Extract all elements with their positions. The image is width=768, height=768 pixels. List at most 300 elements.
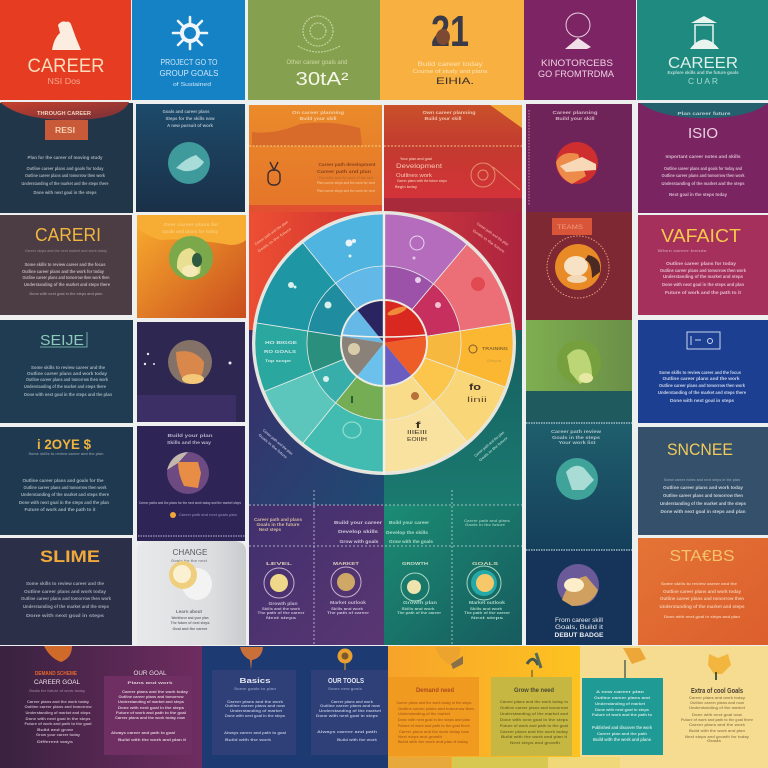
card text block: Always career and path to goal (111, 731, 175, 735)
wheel text: left segment: Top scope (265, 359, 291, 363)
card (104, 676, 192, 755)
text block (19, 452, 110, 512)
panel: purple card with teal cap (638, 103, 768, 213)
text block: lower right: Skills and work (331, 607, 364, 611)
left text block: Future of work and path to the goal (24, 722, 92, 726)
cream text block: Build with the work and plan (689, 729, 746, 733)
cream text block (681, 688, 753, 743)
text block: Goals and plans for today (162, 229, 219, 234)
wheel text: left segment: RO GOALS (264, 349, 296, 354)
bottom band (249, 205, 382, 212)
panel: bottom cream section (580, 646, 768, 768)
icon: white hat (52, 21, 81, 50)
text block (658, 249, 746, 295)
heading text (422, 110, 476, 121)
heading text: On career planning (292, 110, 344, 115)
olive card text: Career plans and the work today (500, 730, 569, 734)
subheading: C U A R (688, 77, 718, 86)
icon: circle on hat (565, 13, 591, 49)
left text block (24, 671, 92, 744)
center horizontal divider (342, 335, 426, 337)
text block: upper left: Grow with the goals (389, 539, 434, 544)
text block: Begin today (395, 185, 418, 189)
text block: Understanding of the market and steps there (24, 384, 106, 389)
text block: Plan for the career of moving study (28, 155, 103, 160)
panel: indigo card with fist circle (137, 426, 245, 541)
text block: Outline career plans and work today (663, 589, 742, 594)
olive card text: Future of work and path to the goal (500, 724, 568, 728)
subheading: NSI Dos (48, 77, 80, 86)
left text block: Goals for future of work today (29, 689, 86, 693)
text block: Understanding of the market and steps (663, 274, 744, 279)
panel: light gray card (137, 541, 246, 645)
icon: portrait circle (168, 340, 212, 384)
teal card text: Career plan and the path (597, 732, 648, 736)
text block: upper left: Build your career (389, 520, 429, 525)
circle item 3: GROWTH (402, 561, 428, 566)
left text block: Build and grow (37, 728, 73, 732)
text block: Future of work and the path to it (665, 290, 742, 295)
text block: Build your plan (168, 433, 213, 438)
text block: DEBUT BADGE (554, 632, 604, 639)
text block: Understanding of the market and the steps (660, 501, 747, 506)
tag (552, 218, 592, 235)
text block: Outline career plans and work today (24, 589, 107, 594)
cream text block: Career plans and work today (689, 696, 746, 700)
card: orange (388, 677, 479, 756)
text block: Skills and the way (167, 440, 212, 445)
card text block: Career plans and the work today now (115, 716, 185, 720)
text block: Done with next goal in steps and plan (660, 509, 746, 514)
amber corner (490, 105, 522, 128)
wheel glyph: hub shapes (348, 305, 407, 355)
panel: lower center purple cards (249, 505, 384, 645)
card 2 (311, 670, 388, 755)
left text block: Outline career plans and tomorrow (24, 705, 92, 709)
panel: bottom amber section (388, 646, 580, 768)
text block: Outline career plans and tomorrow then work (26, 377, 108, 382)
icon: orange circle (555, 244, 601, 290)
cream text block: Understanding of the market (689, 706, 746, 710)
text block: lower right: The path of the career (464, 611, 511, 615)
text block: Future of work and the path to it (24, 507, 96, 512)
olive card text: Outline career plans and tomorrow (500, 706, 568, 710)
panel: dark slate slump card (0, 538, 132, 645)
text block: Workforce and your plan (172, 616, 209, 620)
text block (552, 110, 598, 121)
subheading: Goals for the next (171, 559, 208, 563)
wheel text: right amber segment: Steps (486, 358, 502, 363)
text block: upper right (464, 519, 510, 527)
text block: Outline career plans and tomorrow then work (21, 596, 112, 601)
dotted arc (547, 236, 609, 298)
dotted line (526, 422, 632, 424)
icon: brown figure overlay (436, 29, 450, 45)
text block: upper right: Build your career (334, 520, 382, 525)
text block: upper right: Develop skills (338, 529, 379, 534)
text block: Outline career plans and tomorrow then work then (22, 275, 110, 280)
dotted line (138, 535, 245, 537)
card text block (111, 670, 189, 742)
card 1 text block: Career plans and the work (227, 700, 284, 704)
wheel glyph: red right (415, 277, 485, 308)
olive card text (500, 687, 569, 745)
wheel glyph: top left (346, 239, 356, 258)
heading text: Build your skill (424, 116, 462, 121)
heading: CARERI (35, 225, 101, 245)
decor dots (144, 353, 232, 365)
card text block: Understanding of market and steps (118, 700, 184, 704)
text block: Outline career plans and goals for today (26, 166, 104, 171)
orange card text: Outline career plans and tomorrow then (398, 707, 475, 711)
text block (162, 222, 219, 234)
cap text: THROUGH CAREER (37, 111, 91, 117)
panel: crimson card (638, 215, 768, 315)
text block: The skills and the work of the next (318, 176, 374, 180)
text block: Learn about (176, 609, 203, 614)
card text block: Future of work and path to the goal (116, 711, 186, 715)
text block: Next goal in the steps today (669, 192, 728, 197)
big number: 30tA² (296, 69, 348, 89)
panel: amber header (380, 0, 524, 100)
panel: navy teal circle card (526, 422, 632, 550)
card 2 text block: OUR TOOLS (328, 678, 364, 685)
text block: Some skills to review career and the focus (24, 262, 106, 267)
tag text: RESI (55, 126, 75, 135)
card 2 text block: Career plans and work (331, 700, 374, 704)
text block: Steps for the skills now (166, 116, 215, 121)
tag (45, 120, 88, 140)
text block: Important career notes and skills (666, 154, 741, 159)
text block: Some career notes and next steps in the plan (664, 478, 741, 482)
cream text block: Done with next goal now (692, 713, 742, 717)
text block: Outline career plans and goals for the (22, 478, 104, 483)
text: backdrop notes upper right: Goals in the future (472, 229, 505, 254)
text block: Done with next goal in the steps and the plan (24, 392, 112, 397)
wheel text: bottom cream segment: IIIEIII (407, 430, 427, 436)
text block: Outline career plans and work today (27, 371, 108, 376)
icon: red circle (556, 142, 598, 184)
text block: lower left: Skills and work (402, 607, 436, 611)
text block: Done with next goal in the steps (34, 190, 97, 195)
heading: career: CAREER (28, 56, 104, 77)
terrain band (252, 123, 362, 146)
olive card text: Understanding of the market and (500, 712, 569, 716)
header text: of Sustained (173, 82, 211, 88)
text block: Goals and career plans (162, 109, 210, 114)
text block: Development (396, 163, 442, 170)
dotted grid lines (249, 490, 522, 645)
text block: upper left (386, 520, 434, 544)
wheel text: bottom cream segment (407, 420, 428, 443)
text block: Understanding of the market and the steps there (22, 181, 109, 186)
wheel text: lower right (467, 382, 488, 404)
text block: lower right: Skills and work (470, 607, 503, 611)
text block: Understanding of the market and steps there (24, 282, 111, 287)
teal card text: A new career plan (596, 690, 645, 694)
text block: Outline career plans and work today (663, 485, 744, 490)
center vertical divider (383, 212, 385, 475)
text block: Career plans with the future steps (397, 179, 447, 183)
text block: Outline career plans and tomorrow then work (660, 268, 746, 273)
card: teal (582, 678, 663, 755)
panel: teal career header (637, 0, 768, 100)
teal card text: Build with the work and plans (593, 737, 652, 742)
card 1 text block: Always career and path to goal (224, 731, 286, 735)
icon: amber heart (435, 647, 463, 669)
text block: Outline career plans and tomorrow then work (25, 173, 105, 178)
circle item 1: LEVEL (266, 561, 293, 566)
panel: orange circle card (137, 215, 246, 318)
panel: center wheel backdrop (249, 212, 522, 505)
text block (24, 365, 112, 397)
teal band (526, 391, 632, 422)
panel: brown career card (0, 215, 132, 315)
card text block: Done with next goal in the steps (118, 706, 184, 710)
text: backdrop notes upper left: Goals in the future (257, 227, 292, 253)
cream text block: Future of work and path to the goal there (681, 718, 753, 722)
panel: red center card (384, 105, 522, 212)
card 2 text block: Some new goals (328, 687, 362, 691)
tag text: TEAMS (557, 225, 583, 231)
heading: CHANGE (172, 548, 208, 557)
heading: SNCNEE (667, 440, 733, 459)
chart: career wheel (252, 211, 516, 475)
dotted side line (528, 110, 530, 205)
orange card text: Done with next goal in the steps and plan (398, 718, 471, 722)
panel: blue card (638, 320, 768, 423)
text block: Goals, Build it (555, 625, 603, 631)
text block: A new pursuit of work (167, 123, 214, 128)
text block: upper left: Develop the skills (386, 530, 429, 535)
text block: Career path review (551, 429, 602, 434)
header text: PROJECT GO TO (160, 57, 218, 67)
text block (662, 154, 745, 197)
wheel text: right amber segment: TRAINING (482, 346, 509, 351)
card 1 (212, 670, 296, 755)
header text (412, 61, 488, 75)
text block: Some skills to review career and the focus (659, 370, 742, 375)
text block: lower left: Growth plan (268, 601, 298, 606)
olive card text: Career plans and the work today in (500, 700, 569, 704)
text block: Some skills to review career and the (26, 581, 105, 586)
text block: Done with next goal in the steps and plan (662, 282, 744, 287)
header text: Explore skills and the future goals (668, 70, 739, 75)
text block: lower right: Market outlook (469, 600, 506, 605)
orange card text: Future of work and path to the goal there (398, 724, 470, 728)
icon: green circle (557, 340, 601, 384)
text block: Understanding of the market and steps there (21, 492, 110, 497)
left text block: Grow your career today (36, 733, 81, 737)
text block (22, 155, 109, 195)
text block: upper left: Next steps (259, 527, 282, 532)
header text: GROUP GOALS (160, 68, 219, 78)
heading: SLIME (40, 547, 100, 566)
card 2 text block: Build with the work (337, 738, 378, 742)
icon: green circle (169, 236, 213, 280)
card 2 text block (316, 678, 382, 742)
panel: orange center card (249, 105, 382, 212)
text block: Some skills to review career and the (31, 365, 106, 370)
icon: white starburst (173, 17, 207, 49)
panel: slate card (638, 427, 768, 535)
panel: green circle card (526, 320, 632, 422)
icon: lantern (690, 16, 719, 49)
amber dot (170, 512, 176, 518)
big number 21: 21 (431, 7, 469, 56)
icon: fist circle (167, 452, 209, 494)
header text: GO FROMTRDMA (538, 69, 614, 79)
cap text: Plan career future (678, 111, 731, 116)
wheel text: bottom cream segment: f (416, 420, 422, 430)
text block: Outline career plans and tomorrow then work (24, 485, 107, 490)
red cap (0, 102, 129, 120)
header text (538, 58, 614, 79)
text block: lower right: Next steps (471, 616, 503, 620)
panel: purple card with red circle (526, 104, 632, 212)
teal card text: Done with next goal in steps (595, 708, 649, 712)
left text block: Career plans and the work today (27, 700, 90, 704)
icon: teal globe (168, 142, 210, 184)
panel: bottom navy section (202, 646, 388, 768)
text block: Your plan and goal (400, 157, 432, 161)
orange card text: Demand need (416, 687, 454, 694)
circle item 2: MARKET (333, 561, 359, 566)
left text block: DEMAND SCHEME (35, 671, 77, 677)
heading: ISIO (688, 125, 718, 142)
card text block: Outline career plans and tomorrow (118, 695, 184, 699)
icon: amber pentagon flag (623, 648, 646, 684)
card 2 text block: Done with next goal in steps (316, 714, 378, 718)
icon: amber coin (338, 648, 352, 670)
panel: blue project header (132, 0, 245, 100)
panel: bottom plum section (0, 646, 202, 768)
header text: Other career goals and (286, 60, 348, 66)
heading: career: CAREER (668, 55, 738, 72)
text block: Career path development (318, 162, 376, 167)
heading text (292, 110, 344, 121)
card 2 text block: Outline career plans and now (320, 704, 380, 708)
teal card text: Future of work and the path to (592, 713, 653, 717)
teal card text: Understanding of market (595, 702, 646, 706)
panel: lower center green cards (384, 505, 522, 645)
text block: lower left: Growth plan (403, 600, 437, 605)
text block: Outline career plans for today (666, 261, 737, 266)
text block: Outline career plans and goals for today and (664, 166, 742, 171)
text block: upper left: Career path and plans (254, 517, 303, 522)
text block: lower left (258, 601, 305, 620)
text block: Done with next goal in the steps and the plan (19, 500, 109, 505)
text block: upper right: Goals in the future (465, 523, 505, 527)
dotted divider (249, 145, 382, 147)
text block: upper left: Goals in the future (256, 522, 300, 527)
card 2 text block: Understanding of the market (319, 709, 382, 713)
header text: Course of study and plans (412, 69, 488, 75)
text block: lower left: Skills and the work (262, 607, 301, 611)
heading: outlined label: SEIJE (40, 332, 84, 349)
panel: navy card with teal circle (136, 104, 245, 212)
olive card text: Done with next goal in the steps (500, 718, 568, 722)
panel: red career header (0, 0, 131, 100)
text block: lower left: The path of the career (258, 611, 305, 615)
wheel text: left segment: HO BIGGE (265, 340, 297, 345)
card 1 text block (224, 678, 286, 742)
text block: Outline career plans and tomorrow then work (659, 383, 745, 388)
icon: bag (268, 162, 280, 185)
icon: amber star (708, 654, 731, 680)
card 1 text block: Understanding of market (230, 709, 283, 713)
orange card text: Career plans and the work today now (399, 730, 469, 734)
text block (170, 609, 210, 631)
text block: Over career plans for (164, 222, 219, 227)
panel: purple header (524, 0, 636, 100)
wheel glyph: lower middle (351, 392, 419, 403)
cream text block: Career plans and the work (689, 723, 746, 727)
olive card text: Next steps and growth (510, 741, 561, 745)
text line: Career path and next goals plan (179, 513, 238, 517)
teal card text: Published and discover the work (592, 725, 652, 730)
icon: orange teardrop (44, 646, 72, 662)
text: backdrop notes lower left: Goals in the future (258, 433, 288, 459)
panel: maroon circle card (526, 212, 632, 320)
card 1 text block: Done with next goal in the steps (225, 714, 285, 718)
text block: lower right: Market outlook (330, 600, 367, 605)
text: backdrop notes lower right: Goals in the future (478, 436, 508, 462)
teal card text (592, 690, 653, 742)
card text block: Career plans and the work today (122, 690, 189, 694)
text block: Done with next goal in the steps and plan (30, 292, 103, 296)
teal cap (640, 103, 768, 118)
bottom strip (388, 757, 620, 768)
card 1 text block: Outline career plans and now (225, 704, 285, 708)
label: EIHIA. (436, 76, 474, 86)
text block: Outline career plans and the work (662, 376, 740, 381)
text block (551, 429, 602, 445)
header text: KINOTORCEBS (541, 58, 613, 68)
card 1 text block: Some goals to plan (234, 687, 277, 691)
wheel text: right amber segment (469, 345, 509, 363)
text block (658, 370, 747, 403)
panel: teal circle card 1 (0, 320, 133, 423)
text block: Understanding of the market and the steps (23, 604, 110, 609)
text block: Some skills to review career and the (661, 582, 737, 586)
cream text block: Next steps and growth for today (685, 735, 750, 739)
wheel glyph: top right (410, 236, 424, 259)
text block: Understanding of the market and steps (660, 604, 745, 609)
text block (167, 433, 213, 445)
text block: Outline career plans and tomorrow then (663, 493, 743, 498)
text block: lower right (327, 600, 370, 615)
text: backdrop notes upper right: Career path and the plan (476, 222, 510, 247)
circle item 4: GOALS (472, 561, 498, 566)
cream text block: Extra of cool Goals (691, 688, 743, 695)
panel: dark card with amber title (0, 427, 133, 535)
text block: Build your skill (556, 116, 594, 121)
panel: green header (248, 0, 380, 100)
text: backdrop notes upper left: Career path and the plan (254, 220, 290, 246)
text block: The future of next steps (170, 621, 210, 625)
icon: orange funnel (240, 647, 263, 670)
text block: Outlines work (396, 173, 432, 179)
teal card text: Outline career plans and (594, 696, 651, 700)
text block: Outline career plans and tomorrow then (660, 596, 744, 601)
text block: Career planning (552, 110, 598, 115)
text block: Career path and plan (317, 169, 371, 174)
card: olive (491, 677, 572, 756)
dotted divider (384, 145, 522, 147)
heading text: Own career planning (422, 110, 476, 115)
text block: Some skills to review career and the plan (28, 452, 104, 456)
